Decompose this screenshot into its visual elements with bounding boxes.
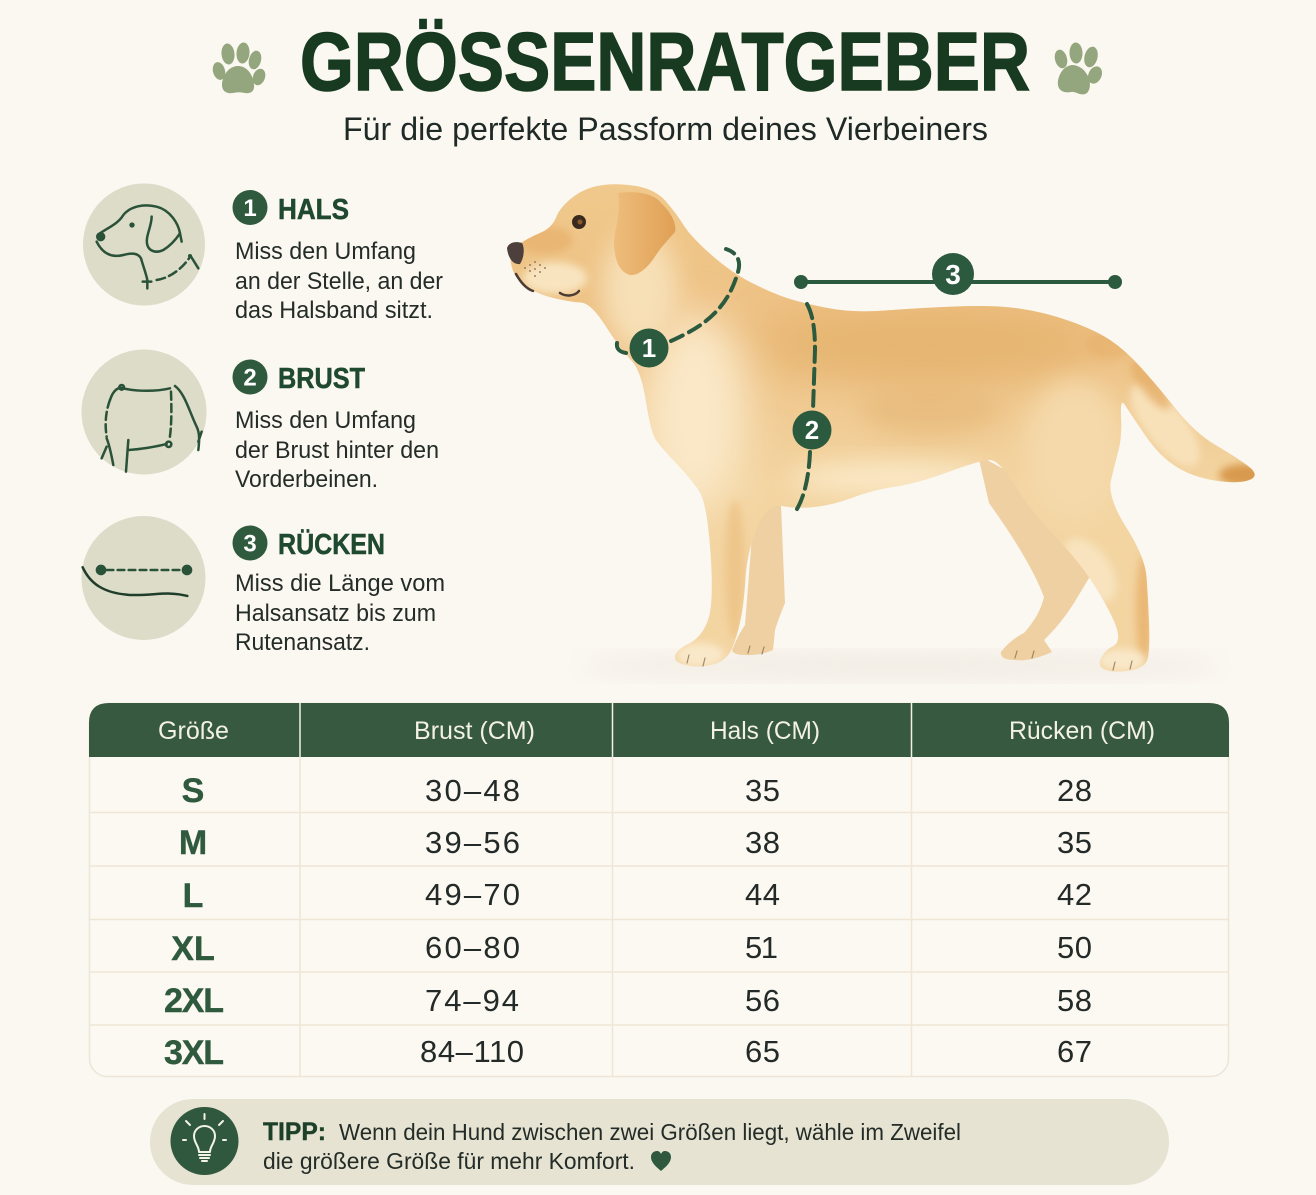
row 3XL: 3XL (164, 1034, 224, 1072)
row XL: XL (171, 930, 215, 968)
panel: measuring instructions (82, 184, 445, 656)
number badge 2 (232, 360, 268, 394)
instruction 1: Hals (83, 184, 443, 324)
instruction 3: Rücken (82, 516, 445, 656)
row S: 28 (1057, 773, 1092, 808)
number badge 1 (232, 190, 268, 225)
heading: Brust: BRUST (278, 363, 365, 395)
back measuring line (794, 275, 1122, 289)
text: Hals description (235, 238, 443, 324)
heading: Rücken: RÜCKEN (278, 528, 385, 561)
icon: back line (82, 516, 206, 640)
text: Brust description: Miss den Umfang (235, 407, 416, 434)
row L: L (183, 877, 203, 915)
row S: 35 (745, 773, 780, 808)
far legs (732, 455, 1095, 660)
tip background (150, 1099, 1169, 1185)
row L: 44 (745, 877, 780, 912)
neck measuring line (617, 249, 739, 353)
text: Hals description: an der Stelle, an der (235, 268, 443, 295)
whisker dots (524, 261, 546, 277)
text: Rücken description: Rutenansatz. (235, 629, 370, 656)
size table (89, 703, 1229, 1077)
title: GRÖSSENRATGEBER (300, 15, 1030, 108)
paw toes (687, 646, 1132, 670)
number badge 3 (232, 526, 268, 560)
row M: M (179, 824, 207, 862)
row M: 39–56 (425, 825, 520, 860)
table header row (89, 703, 1229, 757)
ground shadow (580, 657, 1220, 675)
tip text: TIPP: (263, 1118, 326, 1146)
nose (507, 242, 524, 264)
icon: left paw (211, 42, 268, 93)
ear (614, 192, 675, 275)
number badge 3: 3 (243, 530, 257, 558)
eye (572, 215, 586, 229)
row S: S (182, 772, 204, 810)
chest measuring line (797, 304, 815, 509)
header (211, 15, 1105, 147)
number badge 1: 1 (243, 195, 257, 222)
badge 1 on dog (630, 328, 668, 368)
dog body (490, 170, 1280, 680)
row 3XL: 84–110 (420, 1034, 524, 1069)
table header row: Rücken (CM) (1009, 717, 1155, 745)
text: Brust description: der Brust hinter den (235, 437, 439, 464)
table header row: Hals (CM) (710, 717, 820, 745)
row S (182, 772, 1092, 810)
row 3XL (164, 1034, 1092, 1072)
table header row: Brust (CM) (414, 717, 535, 745)
text: Rücken description: Halsansatz bis zum (235, 600, 436, 627)
dog illustration with measuring lines (490, 170, 1280, 680)
text: Brust description: Vorderbeinen. (235, 466, 378, 493)
text: Rücken description (235, 570, 445, 656)
row S: 30–48 (425, 773, 520, 808)
number badge 2: 2 (243, 364, 257, 392)
table body (90, 704, 1228, 1076)
icon: dog head with neck line (83, 184, 205, 306)
row L: 49–70 (425, 877, 520, 912)
tip text (263, 1118, 961, 1174)
table header row: Größe (158, 717, 229, 745)
heading: Hals: HALS (278, 194, 349, 226)
row XL: 50 (1057, 930, 1092, 965)
row XL (171, 930, 1092, 968)
row 2XL: 2XL (164, 982, 224, 1020)
badge 2 on dog: 2 (805, 415, 819, 445)
text: Hals description: das Halsband sitzt. (235, 297, 433, 324)
badge 1 on dog: 1 (642, 333, 656, 363)
tip text: Wenn dein Hund zwischen zwei Größen liegt, wähle im Zweifel (339, 1119, 961, 1145)
row M: 38 (745, 825, 780, 860)
row 2XL: 56 (745, 983, 780, 1018)
row L (183, 877, 1092, 915)
tip callout (150, 1099, 1169, 1185)
badge 3 on dog (932, 253, 974, 295)
row L: 42 (1057, 877, 1092, 912)
row XL: 51 (745, 930, 778, 965)
text: Hals description: Miss den Umfang (235, 238, 416, 265)
row XL: 60–80 (425, 930, 520, 965)
tip text: die größere Größe für mehr Komfort. (263, 1148, 635, 1174)
text: Brust description (235, 407, 439, 493)
row M (179, 824, 1092, 862)
row 3XL: 65 (745, 1034, 780, 1069)
badge 3 on dog: 3 (945, 259, 961, 290)
row M: 35 (1057, 825, 1092, 860)
row 2XL: 74–94 (425, 983, 519, 1018)
icon: chest outline (82, 350, 206, 474)
icon: light bulb (170, 1107, 238, 1175)
badge 2 on dog (792, 410, 832, 450)
icon: heart (651, 1151, 671, 1171)
icon: right paw (1053, 42, 1105, 94)
mouth (516, 274, 579, 295)
row 3XL: 67 (1057, 1034, 1092, 1069)
instruction 2: Brust (82, 350, 439, 493)
row 2XL (164, 982, 1092, 1020)
row 2XL: 58 (1057, 983, 1092, 1018)
subtitle: Für die perfekte Passform deines Vierbeiners (343, 111, 988, 147)
text: Rücken description: Miss die Länge vom (235, 570, 445, 597)
